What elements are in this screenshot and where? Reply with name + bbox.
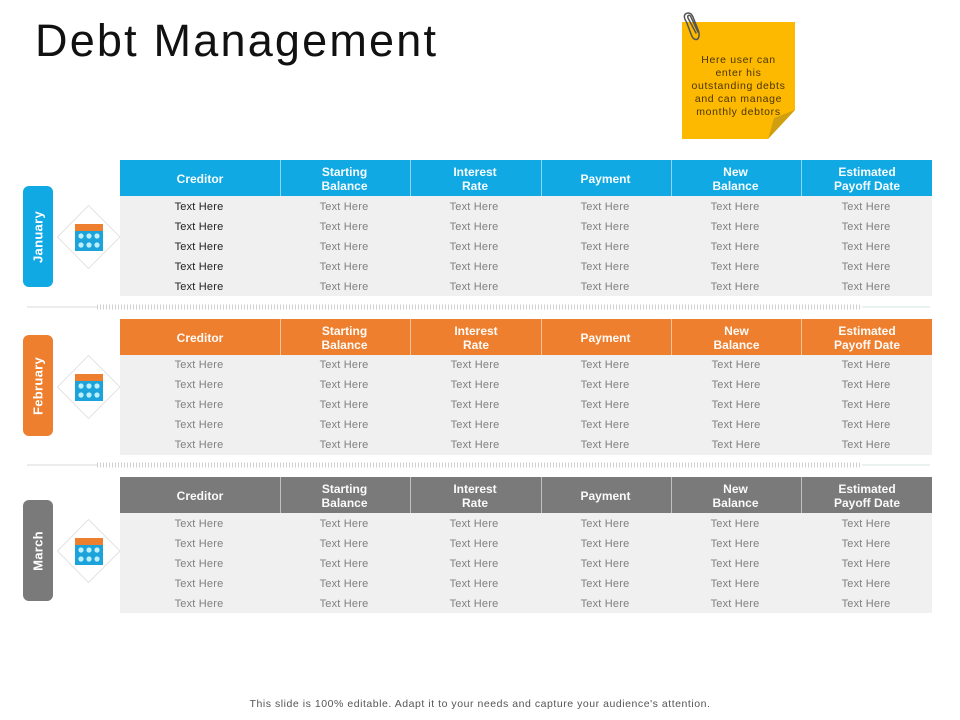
data rows: February: Text Here [175,379,223,391]
icon: January calendar [57,205,120,269]
data rows: January: Text Here [711,261,759,273]
sticky note text: and can manage [695,93,782,105]
data rows: March: Text Here [450,518,498,530]
data rows: March: Text Here [450,558,498,570]
data rows: February: Text Here [175,399,223,411]
divider: first [27,304,930,310]
header row: February: New [724,324,749,338]
month label: January [23,186,53,287]
data rows: February: Text Here [451,419,499,431]
header row: January: Payoff Date [834,179,900,193]
sticky note [682,12,795,139]
data rows: January: Text Here [842,261,890,273]
data rows: January: Text Here [842,241,890,253]
data rows: March: Text Here [842,518,890,530]
data rows: February: Text Here [712,359,760,371]
data rows: January: Text Here [175,261,223,273]
header row: January: Rate [462,179,488,193]
data rows: January: Text Here [842,221,890,233]
data rows: February: Text Here [175,439,223,451]
data rows: January: Text Here [842,201,890,213]
data rows: February [120,355,932,455]
header row: January [120,160,932,196]
data rows: February: Text Here [581,439,629,451]
header row: March: New [723,482,748,496]
icon: March calendar [57,519,120,583]
data rows: January: Text Here [581,261,629,273]
header row: February [120,319,932,355]
data rows: February: Text Here [320,439,368,451]
data rows: January: Text Here [450,201,498,213]
header row: January: Payment [580,172,631,186]
data rows: February: Text Here [842,379,890,391]
data rows: January: Text Here [320,241,368,253]
header row: March [120,477,932,513]
header row: January: Interest [453,165,497,179]
data rows: March: Text Here [175,558,223,570]
month label: February [23,335,53,436]
data rows: March: Text Here [320,538,368,550]
data rows: January: Text Here [450,281,498,293]
month label: March [23,500,53,601]
header row: March: Estimated [838,482,896,496]
data rows: March: Text Here [581,598,629,610]
data rows: February: Text Here [320,399,368,411]
data rows: February: Text Here [451,439,499,451]
data rows: March: Text Here [320,518,368,530]
data rows: March: Text Here [320,598,368,610]
data rows: March: Text Here [711,518,759,530]
data rows: February: Text Here [581,399,629,411]
header row: February: Rate [463,338,489,352]
data rows: January: Text Here [711,281,759,293]
data rows: January: Text Here [450,221,498,233]
data rows: February: Text Here [842,419,890,431]
data rows: January: Text Here [175,241,223,253]
data rows: February: Text Here [712,399,760,411]
data rows: January: Text Here [175,201,223,213]
header row: February: Payoff Date [834,338,900,352]
data rows: March: Text Here [842,538,890,550]
sticky note text: outstanding debts [692,80,785,92]
data rows: February: Text Here [581,359,629,371]
header row: January: New [723,165,748,179]
data rows: March: Text Here [175,598,223,610]
header row: March: Starting [322,482,367,496]
header row: March: Balance [321,496,368,510]
header row: March: Balance [712,496,759,510]
data rows: February: Text Here [712,419,760,431]
data rows: February: Text Here [712,439,760,451]
header row: March: Rate [462,496,488,510]
data rows: February: Text Here [175,419,223,431]
footer note: This slide is 100% editable. Adapt it to your needs and capture your audience's attention. [250,698,710,710]
title: Debt Management [35,15,438,66]
header row: February: Creditor [177,331,223,345]
sticky note text: enter his [715,67,762,79]
data rows: March: Text Here [711,598,759,610]
header row: January: Creditor [177,172,223,186]
data rows: February: Text Here [842,439,890,451]
sticky note text: Here user can [701,54,776,66]
header row: January: Starting [322,165,367,179]
data rows: January: Text Here [842,281,890,293]
data rows: January: Text Here [711,221,759,233]
header row: March: Creditor [177,489,223,503]
data rows: January: Text Here [320,281,368,293]
data rows: March: Text Here [450,538,498,550]
data rows: March: Text Here [711,558,759,570]
header row: February: Balance [713,338,760,352]
data rows: February: Text Here [320,379,368,391]
data rows: March: Text Here [842,598,890,610]
data rows: January: Text Here [450,261,498,273]
data rows: March: Text Here [842,578,890,590]
data rows: January: Text Here [581,201,629,213]
icon: February calendar [57,355,120,419]
sticky note text: monthly debtors [696,106,781,118]
header row: January: Estimated [838,165,896,179]
month label: January: January [30,211,46,262]
header row: March: Payoff Date [834,496,900,510]
data rows: March: Text Here [581,538,629,550]
data rows: January: Text Here [450,241,498,253]
data rows: January: Text Here [581,241,629,253]
header row: March: Interest [453,482,497,496]
data rows: March: Text Here [842,558,890,570]
header row: February: Payment [580,331,631,345]
data rows: January: Text Here [175,281,223,293]
data rows: March: Text Here [320,578,368,590]
data rows: January: Text Here [711,241,759,253]
data rows: March: Text Here [711,578,759,590]
data rows: January: Text Here [320,221,368,233]
data rows: March: Text Here [581,578,629,590]
month label: February: February [30,356,46,415]
data rows: March: Text Here [581,518,629,530]
table: January [120,160,932,296]
data rows: February: Text Here [581,419,629,431]
data rows: March: Text Here [175,578,223,590]
data rows: January: Text Here [175,221,223,233]
data rows: March: Text Here [711,538,759,550]
header row: February: Starting [322,324,367,338]
divider: second [27,462,930,468]
data rows: February: Text Here [842,399,890,411]
data rows: January: Text Here [320,201,368,213]
data rows: February: Text Here [451,379,499,391]
header row: February: Interest [454,324,498,338]
sticky note text [692,54,785,118]
data rows: January [120,196,932,296]
data rows: March: Text Here [450,598,498,610]
data rows: January: Text Here [581,221,629,233]
data rows: March: Text Here [175,518,223,530]
header row: January: Balance [712,179,759,193]
data rows: February: Text Here [451,359,499,371]
data rows: January: Text Here [581,281,629,293]
data rows: January: Text Here [320,261,368,273]
data rows: February: Text Here [320,359,368,371]
header row: February: Balance [321,338,368,352]
data rows: March: Text Here [175,538,223,550]
header row: February: Estimated [838,324,896,338]
month label: March: March [30,531,46,570]
data rows: March [120,513,932,613]
data rows: March: Text Here [320,558,368,570]
data rows: March: Text Here [581,558,629,570]
data rows: March: Text Here [450,578,498,590]
table: February [120,319,932,455]
table: March [120,477,932,613]
data rows: February: Text Here [451,399,499,411]
data rows: February: Text Here [175,359,223,371]
data rows: January: Text Here [711,201,759,213]
data rows: February: Text Here [581,379,629,391]
header row: March: Payment [580,489,631,503]
data rows: February: Text Here [320,419,368,431]
data rows: February: Text Here [842,359,890,371]
data rows: February: Text Here [712,379,760,391]
header row: January: Balance [321,179,368,193]
